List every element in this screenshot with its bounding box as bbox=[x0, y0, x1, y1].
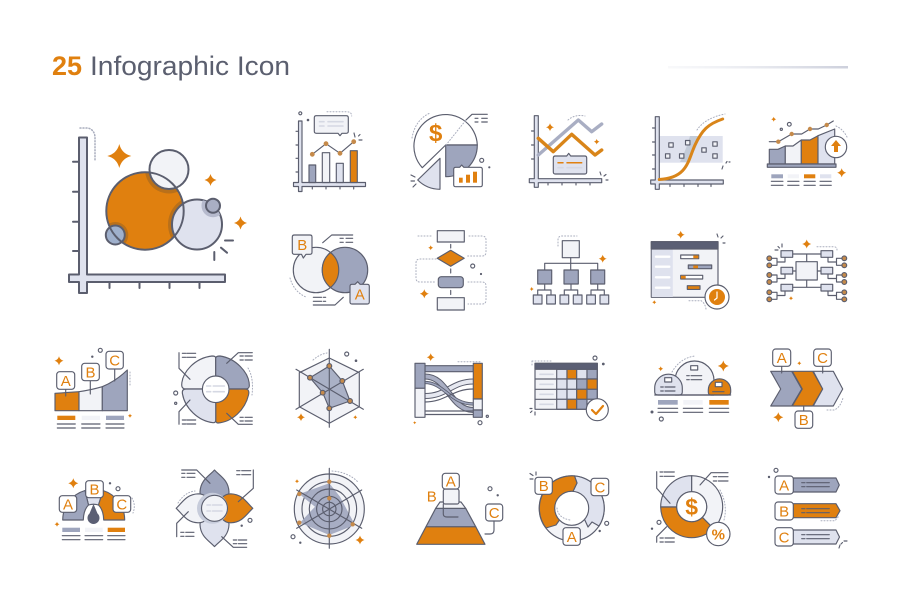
top left segment bbox=[661, 476, 692, 507]
icon: stepped area chart with arrow bbox=[767, 117, 847, 185]
gauge right bbox=[98, 490, 125, 520]
dollar sign: $ bbox=[429, 120, 443, 147]
bottom orange segment bbox=[661, 507, 714, 538]
legend bbox=[658, 400, 729, 412]
orange bubble bbox=[106, 172, 184, 250]
scatter points bbox=[666, 140, 717, 158]
middle layer bbox=[426, 508, 476, 527]
axes bbox=[529, 116, 602, 187]
gauge left bbox=[63, 490, 88, 520]
data points bbox=[308, 364, 352, 411]
middle nodes bbox=[538, 270, 605, 284]
callout bbox=[553, 153, 587, 174]
cells bbox=[557, 369, 597, 409]
data polygon bbox=[310, 366, 350, 408]
label B: B bbox=[89, 482, 100, 498]
hub bbox=[796, 262, 817, 280]
window bbox=[651, 242, 718, 297]
label A: A bbox=[61, 373, 71, 390]
top bubble bbox=[150, 150, 188, 189]
label A: A bbox=[446, 474, 456, 490]
label B: B bbox=[427, 488, 437, 506]
tag C: C bbox=[779, 530, 790, 546]
hexagon bbox=[299, 358, 359, 423]
mini bar bubble bbox=[454, 165, 482, 187]
axes bbox=[294, 121, 366, 192]
orange series bbox=[538, 134, 602, 155]
badge A: A bbox=[355, 286, 365, 304]
icon: zigzag line chart bbox=[529, 116, 608, 187]
icon: four-petal ring diagram bbox=[174, 353, 252, 424]
icon: pie chart with dollar bbox=[411, 113, 490, 189]
speech bubble bbox=[314, 116, 348, 136]
icon: concentric radar bbox=[291, 468, 364, 548]
gauge middle bbox=[85, 489, 103, 505]
label B: B bbox=[85, 364, 96, 382]
check badge bbox=[586, 399, 608, 421]
center bbox=[202, 376, 229, 403]
top band bbox=[425, 366, 473, 372]
center bbox=[197, 493, 228, 524]
bars bbox=[309, 151, 357, 182]
table frame bbox=[535, 363, 597, 409]
percent badge: % bbox=[712, 526, 725, 544]
side panel bbox=[652, 249, 673, 297]
label A: A bbox=[63, 496, 73, 514]
needle bbox=[88, 504, 100, 524]
icon: gauge bbox=[54, 478, 134, 540]
line series bbox=[310, 139, 356, 157]
ring base bbox=[539, 476, 604, 541]
right column bbox=[473, 363, 482, 417]
s-curve bbox=[659, 119, 723, 180]
icon: venn diagram bbox=[290, 235, 369, 305]
icon: heat table bbox=[530, 356, 608, 421]
axes bbox=[69, 138, 225, 293]
top right segment bbox=[692, 476, 723, 529]
stem bbox=[443, 489, 459, 504]
header bar bbox=[651, 242, 718, 249]
label C: C bbox=[489, 505, 500, 522]
area segments bbox=[55, 370, 127, 411]
trend line bbox=[769, 121, 833, 144]
base bbox=[767, 164, 836, 167]
right bubble bbox=[172, 200, 222, 250]
base layer bbox=[417, 527, 485, 544]
label A: A bbox=[567, 529, 577, 546]
icon: bar and line chart bbox=[294, 112, 366, 192]
orange segment bbox=[539, 476, 577, 528]
left column bbox=[415, 363, 425, 417]
donut hole bbox=[555, 491, 589, 525]
title: Infographic Icon bbox=[90, 51, 290, 81]
leaf nodes bbox=[533, 295, 609, 304]
label C: C bbox=[594, 480, 605, 496]
band bbox=[659, 136, 723, 163]
tag A: A bbox=[779, 478, 789, 494]
center bbox=[677, 492, 707, 522]
bottom petal bbox=[200, 514, 229, 547]
left petal bbox=[176, 494, 209, 523]
icon: area chart with ABC labels bbox=[54, 348, 132, 428]
axes bbox=[651, 117, 723, 189]
gantt bars bbox=[681, 255, 712, 289]
table header bbox=[535, 363, 597, 369]
pie main sector bbox=[414, 115, 477, 168]
icon: domes chart bbox=[650, 356, 731, 421]
pie blue sector bbox=[446, 145, 477, 177]
center dome bbox=[675, 361, 714, 395]
top layer bbox=[436, 502, 466, 508]
end box bbox=[437, 298, 464, 310]
terminal dots bbox=[767, 256, 847, 302]
flows bbox=[425, 376, 473, 414]
clock bbox=[705, 285, 729, 309]
circle A bbox=[322, 247, 368, 293]
top petal bbox=[200, 470, 229, 503]
pie slice bbox=[418, 158, 440, 189]
badge B: B bbox=[297, 237, 307, 254]
right dome bbox=[708, 379, 731, 395]
decision diamond bbox=[437, 250, 464, 266]
start box bbox=[437, 231, 464, 242]
right petal bbox=[220, 494, 253, 523]
left dome bbox=[655, 374, 682, 395]
dollar sign: $ bbox=[685, 494, 698, 520]
icon: pyramid flask bbox=[417, 473, 503, 544]
icon: org chart bbox=[530, 236, 609, 304]
gray series bbox=[538, 120, 602, 155]
icon: four-petal flower bbox=[176, 470, 253, 547]
rings bbox=[294, 474, 364, 544]
title: 25 bbox=[52, 51, 82, 81]
icon: segmented donut bbox=[530, 472, 609, 546]
segments bbox=[182, 356, 249, 423]
circle B bbox=[293, 247, 339, 293]
data polygon bbox=[299, 483, 355, 535]
data points bbox=[297, 480, 355, 538]
first column bbox=[535, 369, 557, 409]
legend bbox=[62, 528, 125, 540]
icon: dollar donut bbox=[651, 472, 730, 546]
legend bbox=[57, 416, 124, 428]
legend bbox=[771, 174, 831, 185]
label A: A bbox=[777, 350, 787, 367]
icon: flowchart bbox=[416, 231, 486, 310]
up arrow badge bbox=[825, 136, 847, 158]
tag B: B bbox=[779, 504, 789, 520]
gray segment bbox=[573, 476, 604, 527]
nodes bbox=[781, 251, 833, 291]
label C: C bbox=[109, 352, 120, 370]
icon: gantt chart bbox=[651, 231, 729, 309]
header rule bbox=[668, 66, 848, 68]
icon: s-curve scatter chart bbox=[651, 114, 730, 189]
overlap bbox=[322, 252, 339, 288]
process box bbox=[438, 277, 463, 288]
area segments bbox=[769, 129, 835, 164]
icon: chevron process bbox=[771, 349, 843, 429]
icon: network diagram bbox=[767, 240, 847, 302]
top node bbox=[562, 241, 579, 258]
icon: sankey diagram bbox=[413, 353, 488, 425]
icon: radar hexagon chart bbox=[296, 349, 363, 427]
label B: B bbox=[539, 478, 549, 495]
small bubbles bbox=[206, 199, 220, 213]
chevrons bbox=[771, 371, 843, 406]
icon: large bubble chart bbox=[69, 128, 247, 293]
label C: C bbox=[116, 496, 127, 514]
label C: C bbox=[817, 350, 828, 367]
icon: tag list bbox=[768, 468, 847, 548]
label B: B bbox=[799, 412, 809, 429]
